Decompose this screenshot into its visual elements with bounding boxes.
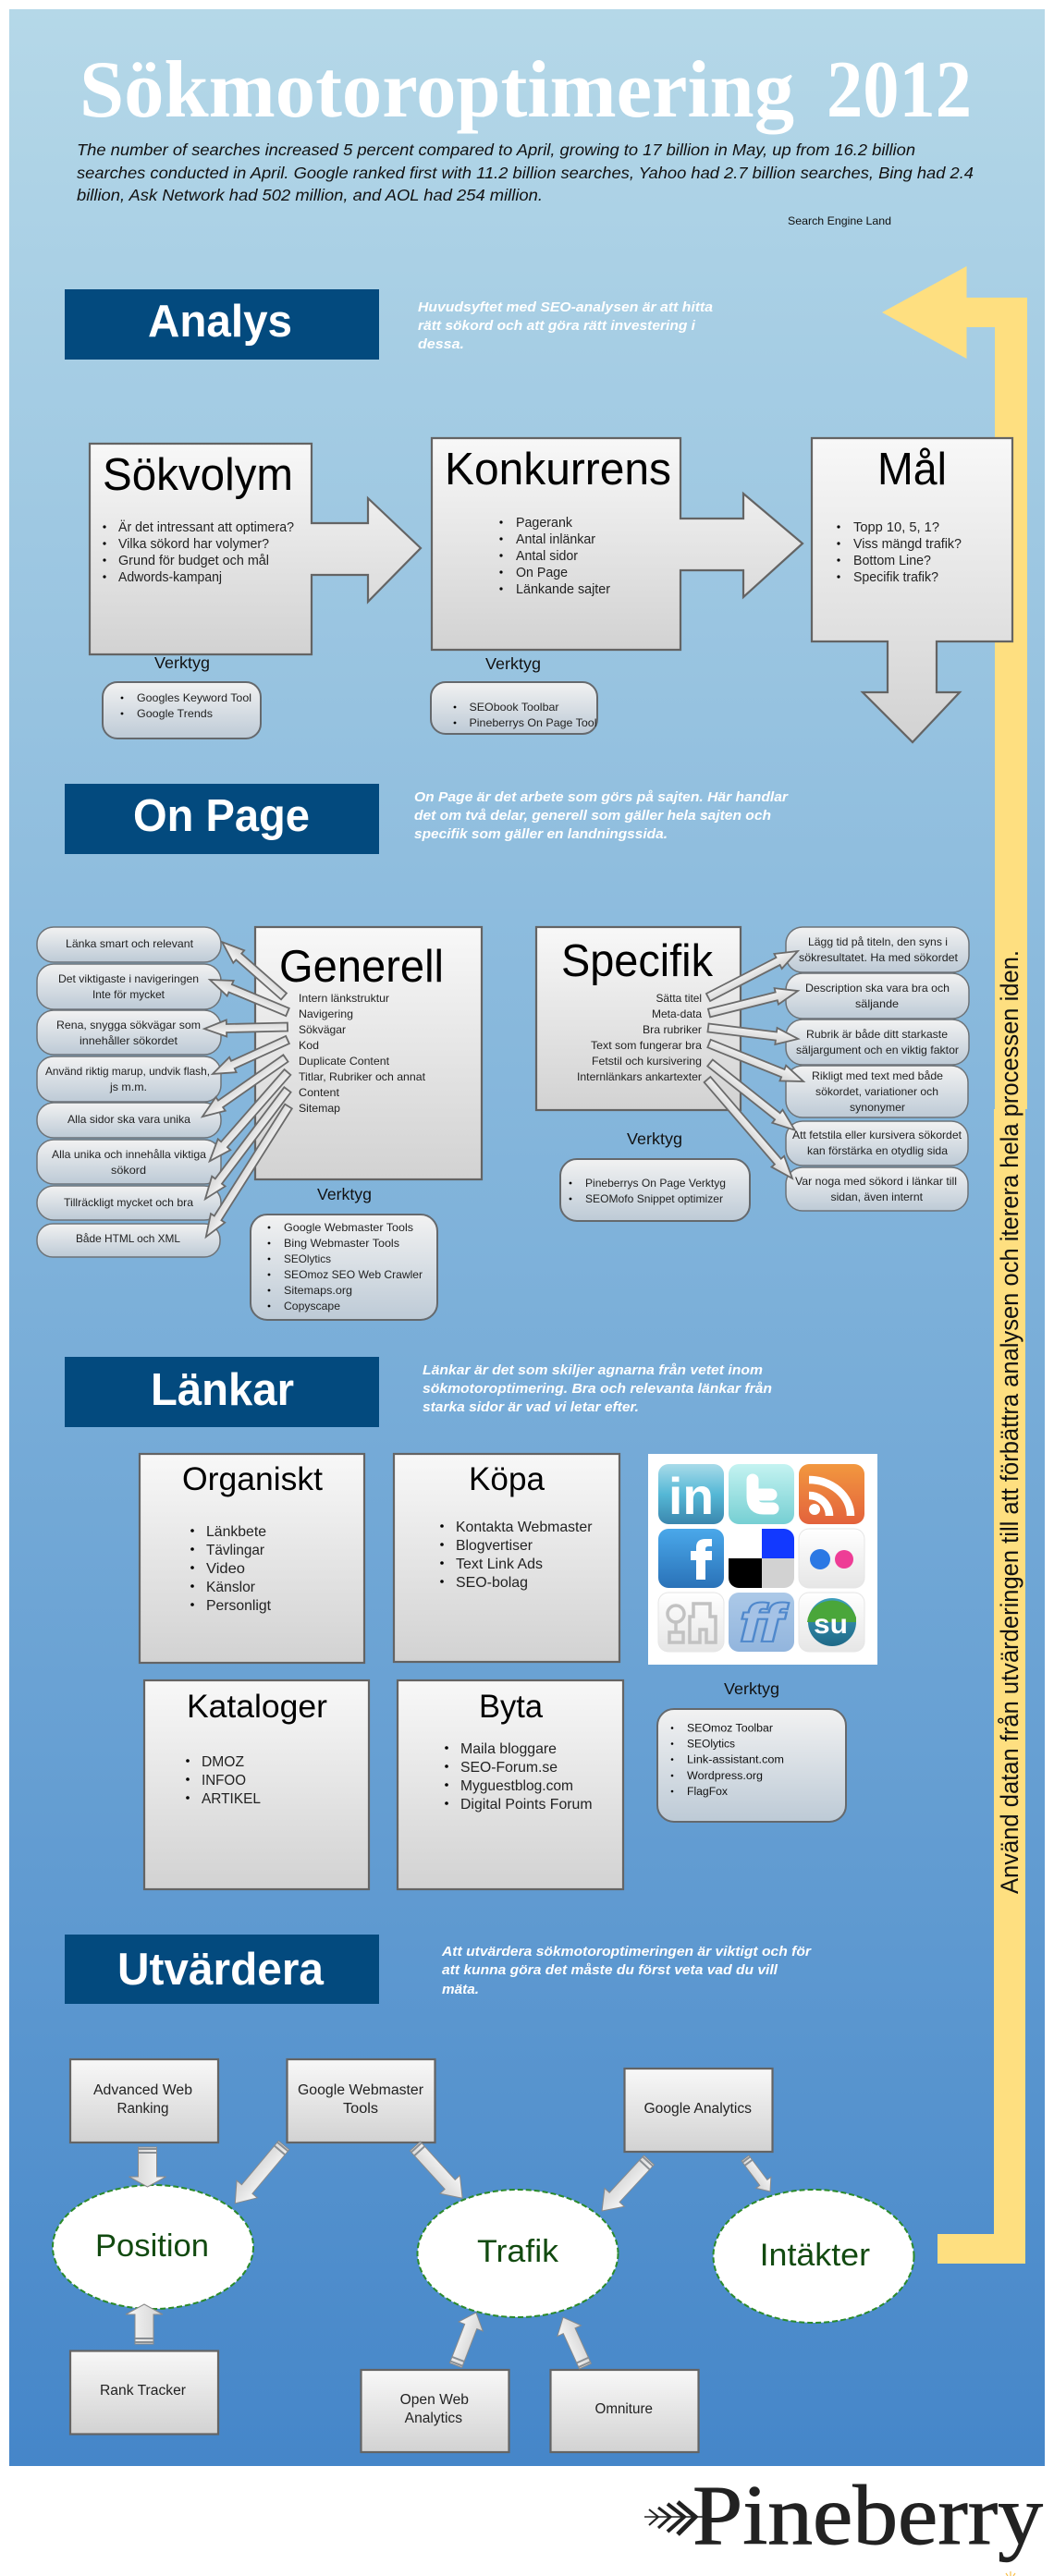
Utvärdera description: Att utvärdera sökmotoroptimeringen är viktigt och för bbox=[441, 1944, 812, 1959]
tool: Advanced Web Ranking: Ranking bbox=[116, 2101, 168, 2117]
tools: Generell: Google Webmaster Tools bbox=[284, 1221, 413, 1234]
pills: specifik tips: kan förstärka en otydlig sida bbox=[807, 1144, 948, 1157]
node: Position: Position bbox=[95, 2228, 209, 2264]
pills: specifik tips: sidan, även internt bbox=[830, 1190, 924, 1203]
heading: Länkar bbox=[65, 1357, 379, 1427]
tools: Specifik bbox=[560, 1159, 750, 1221]
panel: Sökvolym: Grund för budget och mål bbox=[118, 554, 269, 568]
panel: Mål: Specifik trafik? bbox=[853, 570, 938, 585]
node: Intäkter: Intäkter bbox=[760, 2238, 870, 2273]
panel: Mål: Mål bbox=[877, 445, 947, 494]
icon: Facebook bbox=[658, 1529, 724, 1588]
Länkar description: sökmotoroptimering. Bra och relevanta länkar från bbox=[423, 1381, 772, 1397]
icon grid: social media bbox=[648, 1454, 877, 1665]
panel: Konkurrens: Länkande sajter bbox=[516, 582, 610, 597]
panel: Konkurrens: On Page bbox=[516, 566, 568, 580]
label: Verktyg Specifik: Verktyg bbox=[627, 1129, 682, 1148]
Länkar description bbox=[423, 1362, 772, 1415]
Länkar description: starka sidor är vad vi letar efter. bbox=[423, 1399, 639, 1415]
arrows: specifik list to pills bbox=[701, 944, 806, 1184]
tools: Länkar: SEOlytics bbox=[687, 1740, 735, 1751]
pills: generell tips: Inte för mycket bbox=[92, 988, 165, 1001]
tools: Specifik: SEOMofo Snippet optimizer bbox=[585, 1192, 723, 1205]
panel: Specifik: Fetstil och kursivering bbox=[592, 1055, 702, 1068]
tools: Sökvolym bbox=[103, 682, 261, 739]
panel: Konkurrens bbox=[432, 438, 803, 650]
panel: Köpa: SEO-bolag bbox=[456, 1575, 528, 1591]
panel: Byta: Byta bbox=[479, 1689, 544, 1725]
Utvärdera description bbox=[441, 1944, 812, 1997]
pills: generell tips: innehåller sökordet bbox=[80, 1034, 178, 1047]
pills: specifik tips: Att fetstila eller kursivera sökordet bbox=[792, 1129, 962, 1141]
icon: RSS bbox=[799, 1464, 864, 1524]
intro text: The number of searches increased 5 percent compared to April, growing to 17 billion in May, up from 16.2 billion bbox=[77, 140, 915, 159]
pills: specifik tips: Lägg tid på titeln, den syns i bbox=[808, 935, 948, 948]
tools: Specifik: Pineberrys On Page Verktyg bbox=[585, 1177, 726, 1190]
tool: Open Web Analytics bbox=[361, 2370, 509, 2452]
heading: Utvärdera: Utvärdera bbox=[117, 1945, 325, 1995]
Utvärdera description: mäta. bbox=[442, 1982, 479, 1997]
tool: Advanced Web Ranking bbox=[70, 2059, 218, 2143]
intro text: searches conducted in April. Google ranked first with 11.2 billion searches, Yahoo had 2.7 billion searches, Bing had 2.4 bbox=[77, 164, 974, 182]
panel: Konkurrens: Pagerank bbox=[516, 516, 573, 531]
intro text: billion, Ask Network had 502 million, and AOL had 254 million. bbox=[77, 186, 543, 204]
tools: Generell bbox=[251, 1215, 437, 1320]
panel: Generell: Sitemap bbox=[299, 1102, 340, 1115]
icon: Flickr bbox=[799, 1529, 864, 1588]
tools: Länkar: SEOmoz Toolbar bbox=[687, 1723, 773, 1734]
icon: Delicious bbox=[729, 1529, 794, 1588]
intro text bbox=[77, 140, 974, 204]
tools: Generell: Sitemaps.org bbox=[284, 1284, 352, 1297]
panel: Kataloger: INFOO bbox=[202, 1773, 246, 1789]
panel: Sökvolym: Är det intressant att optimera? bbox=[118, 519, 294, 535]
panel: Generell: Generell bbox=[279, 942, 444, 992]
icon: community figures bbox=[658, 1593, 724, 1652]
tools: Länkar: Link-assistant.com bbox=[687, 1754, 784, 1765]
pills: generell tips: Både HTML och XML bbox=[76, 1232, 180, 1245]
panel: Kataloger bbox=[144, 1680, 369, 1889]
panel: Generell: Navigering bbox=[299, 1007, 353, 1020]
panel: Konkurrens: Antal sidor bbox=[516, 549, 578, 564]
pills: generell tips: Rena, snygga sökvägar som bbox=[56, 1019, 201, 1032]
pills: generell tips: Det viktigaste i navigeringen bbox=[58, 972, 199, 985]
icon: small yellow spark bbox=[1006, 2571, 1015, 2576]
pills: generell tips: Alla unika och innehålla viktiga bbox=[52, 1148, 206, 1161]
panel: Generell: Content bbox=[299, 1086, 340, 1099]
panel: Sökvolym bbox=[90, 444, 421, 654]
icon: FriendFeed: ff bbox=[741, 1593, 789, 1652]
heading: On Page: On Page bbox=[133, 791, 310, 841]
tools: Generell: Copyscape bbox=[284, 1300, 340, 1312]
panel: Byta: Maila bloggare bbox=[460, 1741, 557, 1757]
panel: Mål: Viss mängd trafik? bbox=[853, 537, 962, 552]
pills: specifik tips bbox=[786, 927, 969, 1211]
panel: Organiskt: Länkbete bbox=[206, 1524, 266, 1540]
node: Trafik bbox=[418, 2190, 618, 2317]
panel: Köpa bbox=[394, 1454, 619, 1662]
tools: Sökvolym: Google Trends bbox=[137, 707, 213, 720]
tool: Google Webmaster Tools: Tools bbox=[343, 2101, 378, 2117]
logo: Pineberry: Pineberry bbox=[692, 2468, 1043, 2562]
panel: Specifik: Bra rubriker bbox=[643, 1023, 702, 1036]
Länkar description: Länkar är det som skiljer agnarna från vetet inom bbox=[423, 1362, 763, 1378]
panel: Generell: Kod bbox=[299, 1039, 319, 1052]
On Page description: On Page är det arbete som görs på sajten. Här handlar bbox=[414, 789, 789, 805]
pills: generell tips: Använd riktig marup, undvik flash, bbox=[45, 1065, 210, 1078]
pills: specifik tips: synonymer bbox=[850, 1101, 905, 1114]
arrows: tools to metrics bbox=[126, 2137, 778, 2372]
pills: specifik tips: Rubrik är både ditt starkaste bbox=[806, 1028, 948, 1041]
panel: Konkurrens: Konkurrens bbox=[445, 445, 671, 494]
panel: Generell: Sökvägar bbox=[299, 1023, 346, 1036]
heading: Analys: Analys bbox=[148, 297, 292, 347]
tool: Open Web Analytics: Analytics bbox=[405, 2411, 462, 2426]
tools: Generell: Bing Webmaster Tools bbox=[284, 1237, 399, 1250]
pills: generell tips: Länka smart och relevant bbox=[66, 937, 194, 950]
panel: Organiskt: Tävlingar bbox=[206, 1543, 265, 1558]
pills: generell tips: Alla sidor ska vara unika bbox=[67, 1113, 190, 1126]
source credit: Search Engine Land bbox=[788, 214, 891, 227]
Analys description: rätt sökord och att göra rätt investering i bbox=[418, 318, 696, 334]
tool: Open Web Analytics: Open Web bbox=[400, 2392, 469, 2408]
panel: Byta: SEO-Forum.se bbox=[460, 1760, 558, 1776]
node: Intäkter bbox=[714, 2190, 913, 2323]
tool: Advanced Web Ranking: Advanced Web bbox=[93, 2082, 192, 2098]
panel: Köpa: Text Link Ads bbox=[456, 1557, 543, 1572]
pills: specifik tips: Var noga med sökord i länkar till bbox=[795, 1175, 957, 1188]
heading: Analys bbox=[65, 289, 379, 360]
feedback arrow: yellow loop from Utvärdera back to Analys bbox=[882, 266, 1027, 2264]
panel: Sökvolym: Adwords-kampanj bbox=[118, 570, 222, 585]
On Page description: det om två delar, generell som gäller hela sajten och bbox=[414, 808, 771, 824]
icon: Twitter bbox=[729, 1464, 794, 1524]
title: Sökmotoroptimering bbox=[80, 45, 794, 135]
panel: Sökvolym: Vilka sökord har volymer? bbox=[118, 537, 269, 552]
tool: Omniture: Omniture bbox=[595, 2401, 653, 2417]
panel: Kataloger: Kataloger bbox=[187, 1689, 327, 1725]
panel: Organiskt: Personligt bbox=[206, 1598, 272, 1614]
label: Verktyg Länkar: Verktyg bbox=[724, 1679, 779, 1698]
tools: Generell: SEOlytics bbox=[284, 1252, 331, 1265]
label: Verktyg Generell: Verktyg bbox=[317, 1185, 372, 1203]
pills: specifik tips: sökresultatet. Ha med sökordet bbox=[799, 951, 959, 964]
feedback arrow caption: Använd datan från utvärderingen till att förbättra analysen och iterera hela processen iden. bbox=[996, 950, 1023, 1894]
panel: Specifik bbox=[536, 927, 741, 1110]
panel: Organiskt: Organiskt bbox=[182, 1461, 323, 1497]
panel: Kataloger: ARTIKEL bbox=[202, 1791, 261, 1807]
panel: Byta: Myguestblog.com bbox=[460, 1778, 573, 1794]
pills: generell tips: Tillräckligt mycket och bra bbox=[64, 1196, 193, 1209]
node: Position bbox=[53, 2185, 253, 2309]
heading: Länkar: Länkar bbox=[151, 1365, 294, 1415]
panel: Byta bbox=[398, 1680, 623, 1889]
pills: specifik tips: säljande bbox=[855, 997, 899, 1010]
tool: Rank Tracker bbox=[70, 2351, 218, 2435]
node: Trafik: Trafik bbox=[477, 2234, 559, 2269]
tool: Google Webmaster Tools bbox=[287, 2059, 435, 2143]
panel: Köpa: Kontakta Webmaster bbox=[456, 1520, 593, 1535]
pills: specifik tips: säljargument och en viktig faktor bbox=[796, 1044, 959, 1056]
panel: Generell bbox=[255, 927, 482, 1179]
panel: Organiskt: Känslor bbox=[206, 1580, 256, 1595]
tools: Länkar bbox=[657, 1709, 846, 1822]
On Page description bbox=[414, 789, 789, 842]
panel: Specifik: Sätta titel bbox=[656, 992, 702, 1005]
panel: Konkurrens: Antal inlänkar bbox=[516, 532, 595, 547]
panel: Specifik: Specifik bbox=[561, 936, 713, 986]
pills: generell tips: js m.m. bbox=[109, 1080, 147, 1093]
label: Verktyg Sökvolym: Verktyg bbox=[154, 653, 210, 672]
panel: Mål: Topp 10, 5, 1? bbox=[853, 520, 939, 535]
tools: Sökvolym: Googles Keyword Tool bbox=[137, 691, 251, 704]
tool: Google Analytics: Google Analytics bbox=[643, 2101, 752, 2117]
label: Verktyg Konkurrens: Verktyg bbox=[485, 654, 541, 673]
panel: Köpa: Blogvertiser bbox=[456, 1538, 533, 1554]
panel: Specifik: Text som fungerar bra bbox=[591, 1039, 702, 1052]
icon: feather arrow bbox=[644, 2502, 703, 2534]
panel: Mål bbox=[812, 438, 1012, 742]
tool: Rank Tracker: Rank Tracker bbox=[100, 2383, 186, 2399]
Utvärdera description: att kunna göra det måste du först veta vad du vill bbox=[442, 1962, 778, 1978]
icon: LinkedIn bbox=[658, 1464, 724, 1525]
pills: specifik tips: Rikligt med text med både bbox=[812, 1069, 943, 1082]
pills: specifik tips: sökordet, variationer och bbox=[815, 1085, 938, 1098]
panel: Generell: Titlar, Rubriker och annat bbox=[299, 1070, 426, 1083]
icon: LinkedIn: in bbox=[668, 1467, 714, 1525]
arrows: generell list to pills bbox=[198, 935, 296, 1241]
panel: Organiskt: Video bbox=[206, 1561, 245, 1577]
tools: Länkar: FlagFox bbox=[687, 1787, 728, 1798]
icon: StumbleUpon: su bbox=[814, 1609, 848, 1640]
panel: Mål: Bottom Line? bbox=[853, 554, 931, 568]
tools: Generell: SEOmoz SEO Web Crawler bbox=[284, 1268, 423, 1281]
icon: StumbleUpon bbox=[799, 1593, 864, 1652]
tool: Omniture bbox=[551, 2370, 699, 2452]
tools: Konkurrens: SEObook Toolbar bbox=[470, 701, 558, 714]
tool: Google Webmaster Tools: Google Webmaster bbox=[298, 2082, 423, 2098]
Analys description: Huvudsyftet med SEO-analysen är att hitta bbox=[418, 299, 713, 315]
pills: generell tips bbox=[37, 927, 221, 1257]
Analys description bbox=[418, 299, 713, 352]
heading: On Page bbox=[65, 784, 379, 854]
panel: Sökvolym: Sökvolym bbox=[103, 450, 293, 500]
Analys description: dessa. bbox=[418, 336, 464, 352]
panel: Generell: Intern länkstruktur bbox=[299, 992, 389, 1005]
panel: Specifik: Meta-data bbox=[652, 1007, 702, 1020]
tools: Konkurrens: Pineberrys On Page Tool bbox=[470, 716, 597, 729]
heading: Utvärdera bbox=[65, 1935, 379, 2004]
pills: specifik tips: Description ska vara bra och bbox=[805, 982, 950, 995]
panel: Kataloger: DMOZ bbox=[202, 1754, 244, 1770]
On Page description: specifik som gäller en landningssida. bbox=[414, 826, 668, 842]
pills: generell tips: sökord bbox=[111, 1164, 146, 1177]
tools: Konkurrens bbox=[431, 682, 597, 734]
tool: Google Analytics bbox=[625, 2069, 773, 2152]
tools: Länkar: Wordpress.org bbox=[687, 1771, 763, 1782]
panel: Köpa: Köpa bbox=[469, 1461, 545, 1497]
panel: Generell: Duplicate Content bbox=[299, 1055, 390, 1068]
panel: Specifik: Internlänkars ankartexter bbox=[577, 1070, 702, 1083]
panel: Byta: Digital Points Forum bbox=[460, 1797, 592, 1813]
panel: Organiskt bbox=[140, 1454, 364, 1663]
title: 2012 bbox=[827, 45, 972, 135]
icon: FriendFeed bbox=[729, 1593, 794, 1652]
